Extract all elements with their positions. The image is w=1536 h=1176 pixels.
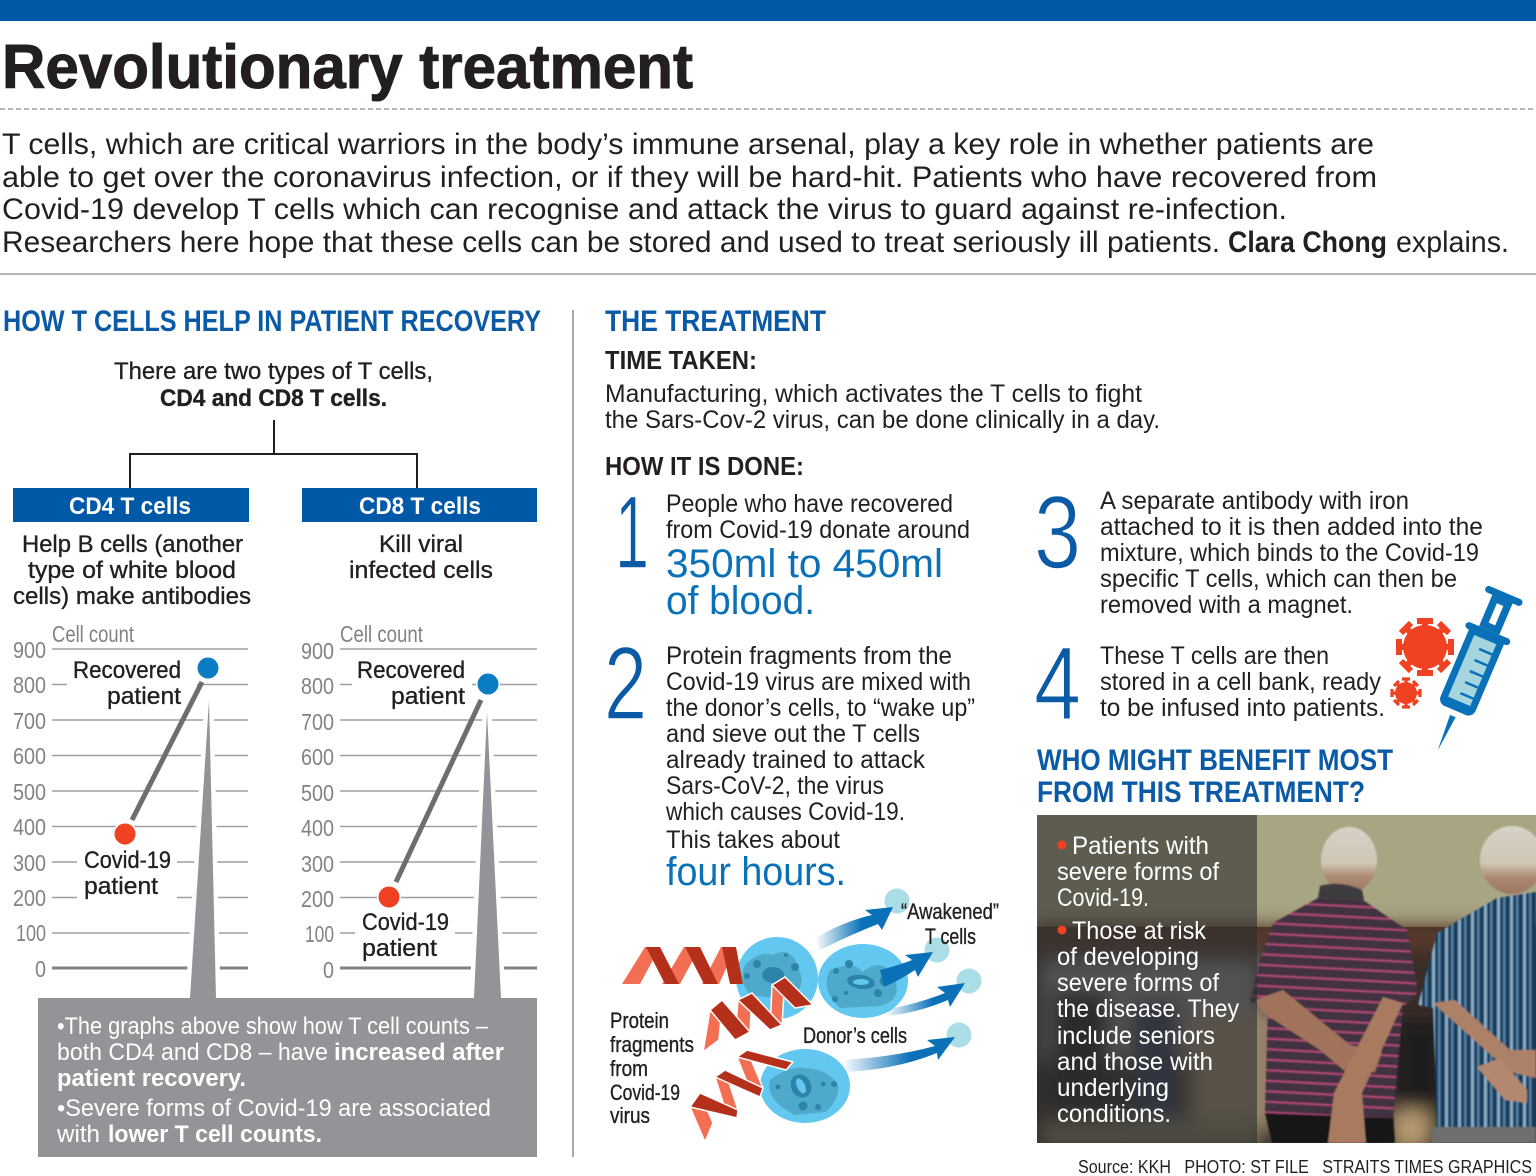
text: who benefits: and those with [1057, 1048, 1213, 1076]
CD8 description: infected cells [349, 557, 493, 584]
label: covid-19 patient: Covid-19 [362, 909, 449, 936]
recovered dot [198, 658, 218, 678]
step 3: 3 [1034, 475, 1081, 591]
chart: CD4 cell count: Cell count [52, 621, 134, 647]
step 3: specific T cells, which can then be [1100, 565, 1457, 593]
label: recovered patient [73, 657, 181, 710]
label: covid-19 patient: patient [362, 935, 437, 962]
text: two types of T cells: CD4 and CD8 T cells. [160, 385, 387, 412]
tree connector [130, 420, 417, 488]
chart: CD4 cell count: 0 [35, 956, 46, 982]
CD4 description: cells) make antibodies [13, 583, 251, 610]
intro text [2, 128, 1509, 259]
text overlay panel [1037, 815, 1257, 1143]
text: who benefits: include seniors [1057, 1022, 1215, 1050]
callout: graph notes: both CD4 and CD8 – have [57, 1039, 328, 1066]
chart: CD8 cell count: 200 [301, 886, 334, 912]
illustration: donor cells and protein fragments [610, 888, 999, 1142]
intro text: T cells, which are critical warriors in the body’s immune arsenal, play a key role in whether patients are [2, 128, 1374, 161]
label: recovered patient [357, 657, 465, 710]
chart: CD8 cell count [301, 621, 537, 998]
text: manufacturing: the Sars-Cov-2 virus, can be done clinically in a day. [605, 406, 1160, 434]
chart: CD8 cell count: 0 [323, 957, 334, 983]
step 1: 350ml to 450ml [666, 542, 943, 586]
ribbon 2 [703, 977, 813, 1052]
chart: CD8 cell count: 100 [305, 921, 334, 947]
cell 1 [736, 937, 818, 1019]
chart: CD4 cell count: 400 [13, 814, 46, 840]
callout: graph notes: patient recovery. [57, 1065, 246, 1092]
label: awakened T cells: “Awakened” [901, 899, 999, 924]
chart: CD8 cell count: 400 [301, 815, 334, 841]
step 2: This takes about [666, 826, 840, 854]
chart: CD8 cell count: Cell count [340, 621, 423, 647]
chart: CD4 cell count: 800 [13, 672, 46, 698]
step 4: These T cells are then [1100, 642, 1329, 670]
chart: CD4 cell count: 600 [13, 743, 46, 769]
text: manufacturing [605, 380, 1160, 434]
chart: CD8 cell count: 300 [301, 851, 334, 877]
text: who benefits: of developing [1057, 943, 1199, 971]
step 1: 1 [615, 475, 649, 591]
chart: CD8 cell count: 500 [301, 780, 334, 806]
icon: syringe [1416, 583, 1527, 760]
top blue bar [0, 0, 1536, 21]
step 3: A separate antibody with iron [1100, 487, 1409, 515]
label: recovered patient: patient [391, 683, 465, 710]
chart: CD4 cell count: 900 [13, 637, 46, 663]
cell 2 [818, 944, 908, 1018]
label: awakened T cells [901, 899, 999, 949]
step 2: Protein fragments from the [666, 642, 952, 670]
label: covid-19 patient: patient [84, 873, 158, 900]
text: who benefits: severe forms of [1057, 858, 1219, 886]
text: two types of T cells: There are two types of T cells, [114, 358, 433, 385]
recovered dot [478, 674, 498, 694]
heading: who might benefit [1037, 744, 1393, 809]
callout: graph notes [38, 998, 537, 1157]
T cells [884, 888, 982, 1048]
text: manufacturing: Manufacturing, which activates the T cells to fight [605, 380, 1142, 408]
chart: CD8 cell count: 900 [301, 638, 334, 664]
label: recovered patient: Recovered [357, 657, 465, 684]
step 4 [1034, 626, 1385, 742]
subheading: how it is done: HOW IT IS DONE: [605, 451, 804, 481]
text: who benefits: severe forms of [1057, 969, 1219, 997]
label: covid-19 patient [362, 909, 449, 962]
CD4 description: type of white blood [28, 557, 236, 584]
label: protein fragments: Protein [610, 1008, 669, 1033]
callout: graph notes: •Severe forms of Covid-19 are associated [57, 1095, 491, 1122]
arrows [815, 907, 965, 1072]
icon: large virus [1399, 621, 1451, 673]
CD4 description: Help B cells (another [22, 531, 243, 558]
CD8 box [302, 488, 537, 522]
step 3: mixture, which binds to the Covid-19 [1100, 539, 1479, 567]
connecting line [132, 682, 202, 820]
label: covid-19 patient [84, 847, 171, 900]
label: protein fragments: from [610, 1056, 648, 1081]
text: two types of T cells [114, 358, 433, 412]
step 4: to be infused into patients. [1100, 694, 1385, 722]
label: recovered patient: patient [107, 683, 181, 710]
heading: how T cells help: HOW T CELLS HELP IN PATIENT RECOVERY [3, 305, 541, 338]
label: awakened T cells: T cells [925, 924, 976, 949]
icon: small virus [1392, 679, 1420, 707]
label: covid-19 patient: Covid-19 [84, 847, 171, 874]
callout: graph notes: lower T cell counts. [108, 1121, 322, 1148]
chart: CD8 cell count: 800 [301, 673, 334, 699]
text: who benefits: the disease. They [1057, 995, 1239, 1023]
chart: CD4 cell count: 300 [13, 850, 46, 876]
pointer spike to note [474, 712, 501, 998]
label: protein fragments [610, 1008, 694, 1128]
step 4: 4 [1034, 626, 1081, 742]
ribbon 3 [690, 1050, 793, 1142]
step 2: already trained to attack [666, 746, 925, 774]
intro text: explains. [1396, 226, 1509, 259]
pointer spike to note [190, 700, 216, 998]
intro text: Clara Chong [1228, 226, 1387, 259]
step 2: four hours. [666, 850, 846, 894]
intro text: able to get over the coronavirus infection, or if they will be hard-hit. Patients who have recovered from [2, 161, 1377, 194]
callout: graph notes: increased after [334, 1039, 504, 1066]
chart: CD4 cell count: 700 [13, 708, 46, 734]
text: who benefits: Covid-19. [1057, 884, 1149, 912]
cell 3 [760, 1049, 850, 1123]
intro text: Covid-19 develop T cells which can recognise and attack the virus to guard against re-infection. [2, 193, 1287, 226]
step 3: attached to it is then added into the [1100, 513, 1483, 541]
CD8 box: CD8 T cells [359, 493, 481, 520]
text: who benefits: underlying [1057, 1074, 1169, 1102]
heading: who might benefit: WHO MIGHT BENEFIT MOST [1037, 744, 1393, 777]
step 2: Covid-19 virus are mixed with [666, 668, 971, 696]
step 3: removed with a magnet. [1100, 591, 1353, 619]
connecting line [396, 700, 481, 882]
man 1 [1250, 827, 1418, 1143]
text: who benefits: conditions. [1057, 1100, 1171, 1128]
CD4 box: CD4 T cells [69, 493, 191, 520]
chart: CD4 cell count: 200 [13, 885, 46, 911]
photo: two elderly men from behind [1030, 815, 1536, 1150]
callout: graph notes: with [56, 1121, 100, 1148]
CD8 description [349, 531, 493, 584]
text: who benefits: Those at risk [1072, 917, 1206, 945]
step 2: and sieve out the T cells [666, 720, 920, 748]
chart: CD8 cell count: 600 [301, 744, 334, 770]
CD4 box [13, 488, 249, 522]
heading: who might benefit: FROM THIS TREATMENT? [1037, 776, 1365, 809]
step 2 [604, 626, 975, 894]
subheading: time taken: TIME TAKEN: [605, 345, 757, 375]
step 2: which causes Covid-19. [665, 798, 905, 826]
chart: CD8 cell count: 700 [301, 709, 334, 735]
man 2 [1418, 826, 1536, 1143]
label: protein fragments: Covid-19 [610, 1080, 680, 1105]
covid dot [378, 886, 400, 908]
step 2: the donor’s cells, to “wake up” [666, 694, 975, 722]
CD4 description [13, 531, 251, 610]
heading: the treatment: THE TREATMENT [605, 305, 826, 338]
step 1: of blood. [666, 579, 815, 623]
label: protein fragments: virus [610, 1103, 650, 1128]
covid dot [114, 824, 136, 844]
text: who benefits [1057, 832, 1239, 1128]
text: who benefits: Patients with [1072, 832, 1209, 860]
step 1 [615, 475, 970, 623]
step 2: Sars-CoV-2, the virus [666, 772, 884, 800]
step 1: from Covid-19 donate around [666, 516, 970, 544]
callout: graph notes: •The graphs above show how T cell counts – [57, 1013, 489, 1040]
chart: CD4 cell count [13, 621, 248, 998]
chart: CD4 cell count: 500 [13, 779, 46, 805]
chart: CD4 cell count: 100 [16, 920, 46, 946]
panel: the treatment [604, 305, 1536, 1150]
step 4: stored in a cell bank, ready [1100, 668, 1381, 696]
intro text: Researchers here hope that these cells can be stored and used to treat seriously ill patients. [2, 226, 1220, 259]
label: donor's cells: Donor’s cells [803, 1023, 907, 1048]
step 1: People who have recovered [666, 490, 953, 518]
panel: how T cells help in patient recovery [3, 305, 541, 1157]
label: protein fragments: fragments [610, 1032, 694, 1057]
CD8 description: Kill viral [379, 531, 463, 558]
title: Revolutionary treatment [2, 33, 693, 102]
label: recovered patient: Recovered [73, 657, 181, 684]
ribbon 1 [622, 947, 743, 984]
step 2: 2 [604, 626, 647, 742]
step 3 [1034, 475, 1483, 619]
